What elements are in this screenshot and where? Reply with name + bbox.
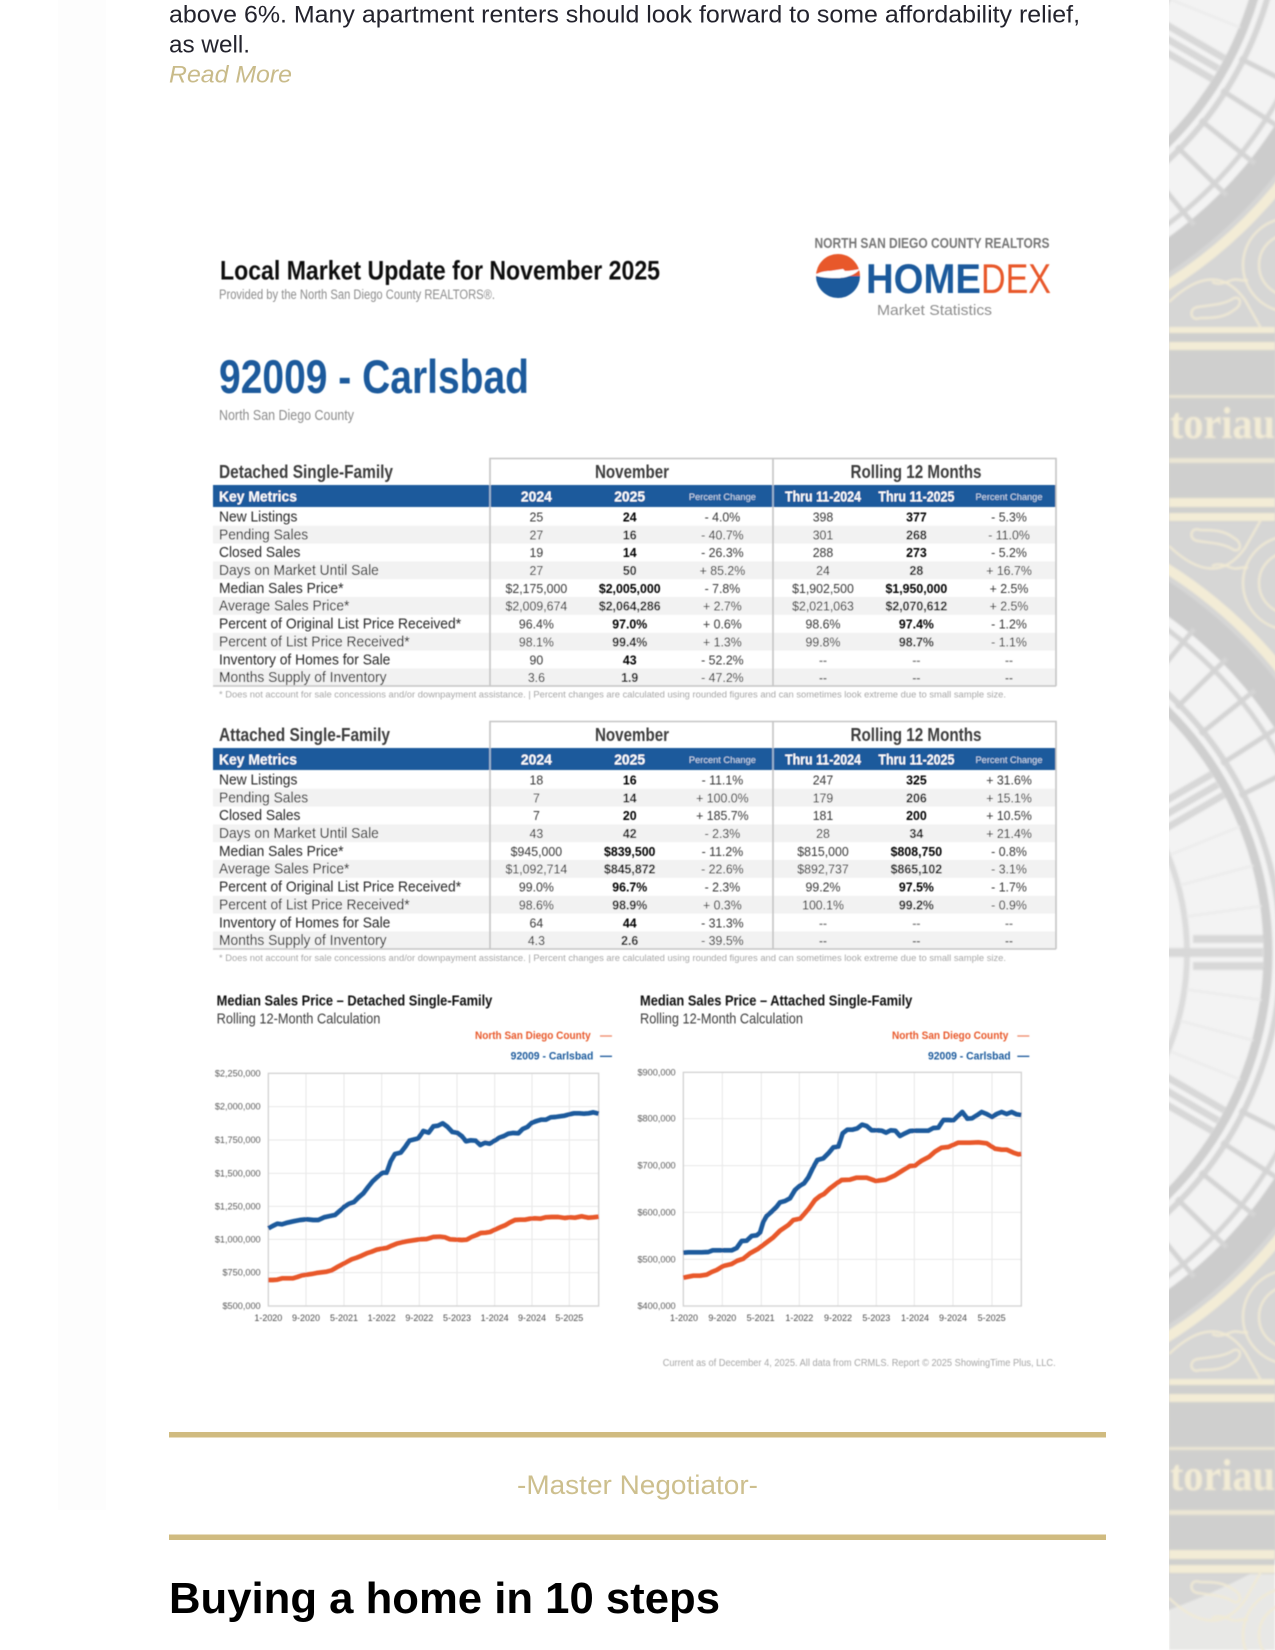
logo: HomeDex (814, 236, 1051, 319)
table: detached single-family: - 5.2% (991, 545, 1027, 560)
table: attached single-family: $815,000 (797, 843, 849, 859)
table: attached single-family: 99.2% (806, 879, 840, 895)
table: attached single-family: 99.2% (899, 897, 935, 912)
line chart: median sales price attached: 9-2024 (939, 1313, 967, 1323)
table: detached single-family: Percent of Original List Price Received* (219, 616, 462, 633)
table: detached single-family: + 2.5% (990, 598, 1028, 614)
article text block (169, 2, 1080, 59)
table: detached single-family: 97.0% (612, 616, 648, 632)
table: attached single-family: + 15.1% (986, 790, 1032, 805)
table: detached single-family: - 5.3% (991, 509, 1027, 525)
table: detached single-family: 27 (530, 563, 543, 578)
line chart: median sales price attached: 5-2023 (862, 1313, 890, 1323)
line chart: median sales price detached: $750,000 (222, 1268, 261, 1278)
table: attached single-family: $839,500 (604, 843, 655, 859)
line chart: median sales price attached (637, 993, 1029, 1323)
table: detached single-family: - 26.3% (701, 545, 744, 560)
table: attached single-family: 2.6 (621, 933, 638, 948)
table: attached single-family: 325 (906, 772, 927, 788)
table: attached single-family: -- (1005, 916, 1013, 930)
table: detached single-family: $1,950,000 (886, 580, 947, 596)
logo: HomeDex: DEX (981, 255, 1051, 302)
table: attached single-family: 7 (533, 790, 540, 805)
table: attached single-family: Months Supply of Inventory (219, 933, 387, 949)
table: attached single-family: $945,000 (511, 843, 562, 859)
table: attached single-family: Key Metrics (219, 753, 297, 769)
table: attached single-family: 100.1% (802, 897, 844, 912)
line chart: median sales price attached: 5-2025 (978, 1313, 1006, 1323)
line chart: median sales price detached: 1-2022 (368, 1313, 396, 1323)
table: attached single-family: $808,750 (891, 843, 942, 859)
table: attached single-family: Percent of List Price Received* (219, 897, 410, 913)
table: detached single-family: 27 (530, 527, 543, 542)
line chart: median sales price detached: 5-2023 (443, 1313, 471, 1323)
table: detached single-family: Inventory of Homes for Sale (219, 652, 390, 668)
table: attached single-family: Rolling 12 Months (850, 725, 982, 745)
table: attached single-family: - 11.1% (702, 772, 743, 788)
line chart: median sales price attached: 1-2024 (901, 1313, 929, 1323)
table: attached single-family: 179 (813, 790, 833, 805)
table: attached single-family: Percent of Original List Price Received* (219, 879, 462, 896)
table: detached single-family: + 0.6% (703, 616, 742, 632)
report footer note: Current as of December 4, 2025. All data from CRMLS. Report © 2025 ShowingTime Plus, LLC. (663, 1358, 1056, 1369)
line chart: median sales price detached: $1,000,000 (215, 1234, 261, 1244)
table: detached single-family: Average Sales Price* (219, 598, 350, 615)
table: attached single-family: Inventory of Homes for Sale (219, 915, 390, 931)
table: detached single-family: 377 (906, 509, 927, 525)
table: detached single-family: $2,009,674 (506, 598, 567, 614)
line chart: median sales price detached (215, 993, 612, 1323)
table: attached single-family: + 21.4% (986, 826, 1032, 841)
table: detached single-family: 97.4% (899, 616, 935, 632)
line chart: median sales price detached: Median Sales Price – Detached Single-Family (217, 993, 493, 1009)
table: attached single-family: - 2.3% (705, 826, 740, 841)
table: detached single-family: 2024 (521, 490, 552, 506)
table: detached single-family: Thru 11-2024 (785, 490, 861, 506)
faint left background texture (58, 0, 106, 1510)
line chart: median sales price detached: 9-2022 (405, 1313, 433, 1323)
table: attached single-family: 43 (530, 826, 543, 841)
table: detached single-family: + 1.3% (703, 634, 742, 649)
line chart: median sales price attached: 9-2022 (824, 1313, 852, 1323)
table: detached single-family: * Does not account for sale concessions and/or downpayment assistance. | Percent changes are calculated using rounded figures and can sometimes look extreme due to small sample size. (219, 690, 1006, 700)
table: attached single-family: - 39.5% (701, 933, 744, 948)
table: attached single-family: -- (1005, 934, 1013, 948)
table: attached single-family: Attached Single-Family (219, 725, 390, 745)
table: attached single-family: 181 (813, 808, 833, 823)
table: detached single-family: -- (1005, 671, 1013, 685)
table: attached single-family: 64 (530, 915, 543, 930)
table: detached single-family: -- (819, 653, 827, 667)
table: attached single-family: 20 (623, 808, 637, 823)
table: detached single-family: 14 (623, 545, 637, 560)
table: detached single-family: + 2.7% (703, 598, 742, 614)
table: detached single-family: - 52.2% (701, 652, 744, 667)
table: detached single-family: - 7.8% (705, 580, 740, 596)
table: attached single-family: Thru 11-2024 (785, 753, 861, 769)
table: attached single-family: $865,102 (891, 861, 942, 877)
table: detached single-family: $2,005,000 (599, 580, 661, 596)
table: attached single-family: Thru 11-2025 (878, 753, 954, 769)
table: attached single-family: Percent Change (689, 755, 756, 765)
table: attached single-family: 97.5% (899, 879, 935, 895)
line chart: median sales price detached: $500,000 (222, 1301, 261, 1311)
table: attached single-family: 14 (623, 790, 637, 805)
line chart: median sales price detached: 9-2020 (292, 1313, 320, 1323)
table: attached single-family: $1,092,714 (506, 861, 567, 877)
table: detached single-family: + 85.2% (700, 563, 745, 578)
line chart: median sales price detached: North San Diego County (475, 1030, 591, 1042)
table: detached single-family: - 47.2% (701, 670, 744, 685)
line chart: median sales price detached: 5-2021 (330, 1313, 358, 1323)
line chart: median sales price detached: 5-2025 (555, 1313, 583, 1323)
table: detached single-family: Months Supply of Inventory (219, 670, 387, 686)
table: detached single-family: -- (912, 671, 920, 685)
table: detached single-family: 50 (623, 563, 637, 578)
table: detached single-family: $2,070,612 (886, 598, 947, 614)
area heading (219, 350, 529, 424)
line chart: median sales price attached: 92009 - Carlsbad (928, 1050, 1011, 1062)
table: attached single-family: November (595, 725, 669, 745)
logo: HomeDex: HOME (866, 255, 981, 302)
table: detached single-family: 16 (623, 527, 637, 542)
line chart: median sales price attached: 1-2022 (785, 1313, 813, 1323)
table: attached single-family: 44 (623, 915, 637, 930)
line chart: median sales price detached: $1,750,000 (215, 1135, 261, 1145)
table: detached single-family: 90 (530, 652, 543, 667)
table: detached single-family: + 2.5% (990, 580, 1028, 596)
table: attached single-family: Closed Sales (219, 808, 300, 824)
table: attached single-family: 34 (910, 826, 924, 841)
table: detached single-family: Percent Change (689, 492, 756, 502)
table: detached single-family (213, 458, 1056, 700)
table: attached single-family: 16 (623, 772, 637, 788)
table: attached single-family: 98.9% (612, 897, 648, 912)
table: attached single-family: Pending Sales (219, 790, 308, 806)
line chart: median sales price attached: Rolling 12-Month Calculation (640, 1011, 803, 1027)
table: detached single-family: $2,021,063 (792, 598, 854, 614)
table: detached single-family: Closed Sales (219, 545, 300, 561)
line chart: median sales price detached: 1-2024 (481, 1313, 509, 1323)
table: detached single-family: Thru 11-2025 (878, 490, 954, 506)
table: attached single-family: Days on Market Until Sale (219, 826, 379, 842)
table: attached single-family: 28 (816, 826, 830, 841)
line chart: median sales price detached: $1,500,000 (215, 1168, 261, 1178)
table: attached single-family: 18 (530, 772, 543, 788)
table: attached single-family: - 2.3% (705, 879, 740, 895)
table: attached single-family: -- (819, 934, 827, 948)
line chart: median sales price attached: $600,000 (637, 1207, 676, 1217)
table: detached single-family: 273 (906, 545, 927, 560)
table: detached single-family: 288 (813, 545, 833, 560)
table: detached single-family: November (595, 462, 669, 482)
table: detached single-family: 19 (530, 545, 543, 560)
line chart: median sales price attached: Median Sales Price – Attached Single-Family (640, 993, 913, 1009)
table: attached single-family: -- (912, 934, 920, 948)
table: detached single-family: 98.1% (519, 634, 554, 649)
table: detached single-family: 99.4% (612, 634, 648, 649)
table: detached single-family: 43 (623, 652, 637, 667)
section heading: Buying a home in 10 steps (169, 1574, 720, 1623)
table: attached single-family: 2025 (614, 753, 645, 769)
table: detached single-family: 3.6 (528, 670, 545, 685)
report title (219, 256, 660, 302)
table: attached single-family: - 0.9% (991, 897, 1027, 912)
table: attached single-family: 96.7% (612, 879, 648, 895)
table: attached single-family: * Does not account for sale concessions and/or downpayment assistance. | Percent changes are calculated using rounded figures and can sometimes look extreme due to small sample size. (219, 953, 1006, 963)
table: detached single-family: 268 (906, 527, 927, 542)
table: attached single-family: 98.6% (519, 897, 554, 912)
right decorative clock-face background strip (1169, 0, 1275, 1650)
table: attached single-family: $892,737 (797, 861, 849, 877)
table: detached single-family: 24 (623, 509, 637, 525)
logo: HomeDex: NORTH SAN DIEGO COUNTY REALTORS (814, 236, 1050, 252)
table: attached single-family: + 185.7% (696, 808, 749, 823)
table: detached single-family: Rolling 12 Months (850, 462, 982, 482)
table: attached single-family: - 22.6% (701, 861, 744, 877)
table: attached single-family: - 11.2% (702, 843, 743, 859)
table: detached single-family: Detached Single-Family (219, 462, 393, 482)
table: attached single-family: $845,872 (604, 861, 655, 877)
line chart: median sales price detached: 9-2024 (518, 1313, 546, 1323)
table: attached single-family: 42 (623, 826, 637, 841)
read more link: Read More (169, 62, 292, 89)
table: detached single-family: Key Metrics (219, 490, 297, 506)
table: attached single-family: Average Sales Price* (219, 861, 350, 878)
line chart: median sales price attached: $400,000 (637, 1301, 676, 1311)
line chart: median sales price attached: $700,000 (637, 1161, 676, 1171)
table: detached single-family: 98.7% (899, 634, 935, 649)
table: detached single-family: 28 (910, 563, 923, 578)
table: attached single-family: + 31.6% (986, 772, 1032, 788)
line chart: median sales price detached: 92009 - Carlsbad (511, 1050, 593, 1062)
table: attached single-family (213, 722, 1056, 963)
table: attached single-family: Percent Change (976, 755, 1042, 765)
table: detached single-family: Percent of List Price Received* (219, 634, 410, 650)
table: detached single-family: - 1.1% (991, 634, 1027, 649)
table: attached single-family: -- (819, 916, 827, 930)
table: detached single-family: 98.6% (806, 616, 840, 632)
line chart: median sales price attached: $800,000 (637, 1114, 676, 1124)
report title: Local Market Update for November 2025 (220, 256, 660, 286)
line chart: median sales price detached: $2,250,000 (215, 1068, 261, 1078)
report title: Provided by the North San Diego County REALTORS®. (219, 287, 495, 302)
table: detached single-family: 24 (816, 563, 830, 578)
line chart: median sales price attached: 1-2020 (670, 1313, 698, 1323)
table: attached single-family: - 0.8% (991, 843, 1027, 859)
table: detached single-family: Percent Change (976, 492, 1042, 502)
line chart: median sales price detached: $1,250,000 (215, 1201, 261, 1211)
table: detached single-family: 398 (813, 509, 833, 525)
table: detached single-family: 96.4% (519, 616, 554, 632)
table: attached single-family: 2024 (521, 753, 552, 769)
table: attached single-family: - 1.7% (991, 879, 1027, 895)
table: detached single-family: - 40.7% (701, 527, 744, 542)
table: attached single-family: - 3.1% (991, 861, 1027, 877)
line chart: median sales price attached: North San Diego County (892, 1030, 1009, 1042)
table: attached single-family: 206 (906, 790, 927, 805)
logo: HomeDex: Market Statistics (877, 302, 992, 319)
tagline: -Master Negotiator- (517, 1470, 758, 1500)
table: detached single-family: - 11.0% (988, 527, 1030, 542)
table: detached single-family: Days on Market Until Sale (219, 563, 379, 579)
line chart: median sales price detached: $2,000,000 (215, 1102, 261, 1112)
table: detached single-family: 2025 (614, 490, 645, 506)
table: detached single-family: - 1.2% (991, 616, 1027, 632)
table: attached single-family: - 31.3% (701, 915, 744, 930)
table: attached single-family: 200 (906, 808, 927, 823)
table: detached single-family: -- (1005, 653, 1013, 667)
area heading: North San Diego County (219, 407, 354, 424)
table: detached single-family: -- (912, 653, 920, 667)
table: detached single-family: - 4.0% (705, 509, 740, 525)
table: detached single-family: 99.8% (806, 634, 840, 649)
line chart: median sales price attached: 9-2020 (708, 1313, 736, 1323)
article text block: above 6%. Many apartment renters should look forward to some affordability relief, (169, 2, 1080, 29)
article text block: as well. (169, 32, 250, 59)
table: attached single-family: + 10.5% (986, 808, 1032, 823)
table: detached single-family: New Listings (219, 509, 297, 526)
table: detached single-family: 25 (530, 509, 543, 525)
table: detached single-family: Pending Sales (219, 527, 308, 543)
table: attached single-family: 7 (533, 808, 540, 823)
line chart: median sales price detached: Rolling 12-Month Calculation (217, 1011, 380, 1027)
table: attached single-family: -- (912, 916, 920, 930)
table: attached single-family: + 100.0% (696, 790, 749, 805)
table: detached single-family: 1.9 (621, 670, 638, 685)
table: detached single-family: $2,175,000 (506, 580, 567, 596)
table: attached single-family: 99.0% (519, 879, 554, 895)
table: detached single-family: + 16.7% (986, 563, 1032, 578)
table: attached single-family: 4.3 (528, 933, 545, 948)
line chart: median sales price attached: $500,000 (637, 1254, 676, 1264)
table: attached single-family: 247 (813, 772, 833, 788)
table: attached single-family: New Listings (219, 772, 297, 789)
table: detached single-family: $2,064,286 (599, 598, 661, 614)
table: attached single-family: Median Sales Price* (219, 844, 344, 860)
table: attached single-family: + 0.3% (703, 897, 742, 912)
table: detached single-family: $1,902,500 (792, 580, 854, 596)
line chart: median sales price attached: 5-2021 (747, 1313, 775, 1323)
line chart: median sales price detached: 1-2020 (254, 1313, 282, 1323)
table: detached single-family: -- (819, 671, 827, 685)
market update report image (213, 236, 1056, 1369)
line chart: median sales price attached: $900,000 (637, 1067, 676, 1077)
area heading: 92009 - Carlsbad (219, 350, 529, 403)
table: detached single-family: 301 (813, 527, 833, 542)
table: detached single-family: Median Sales Price* (219, 581, 344, 597)
